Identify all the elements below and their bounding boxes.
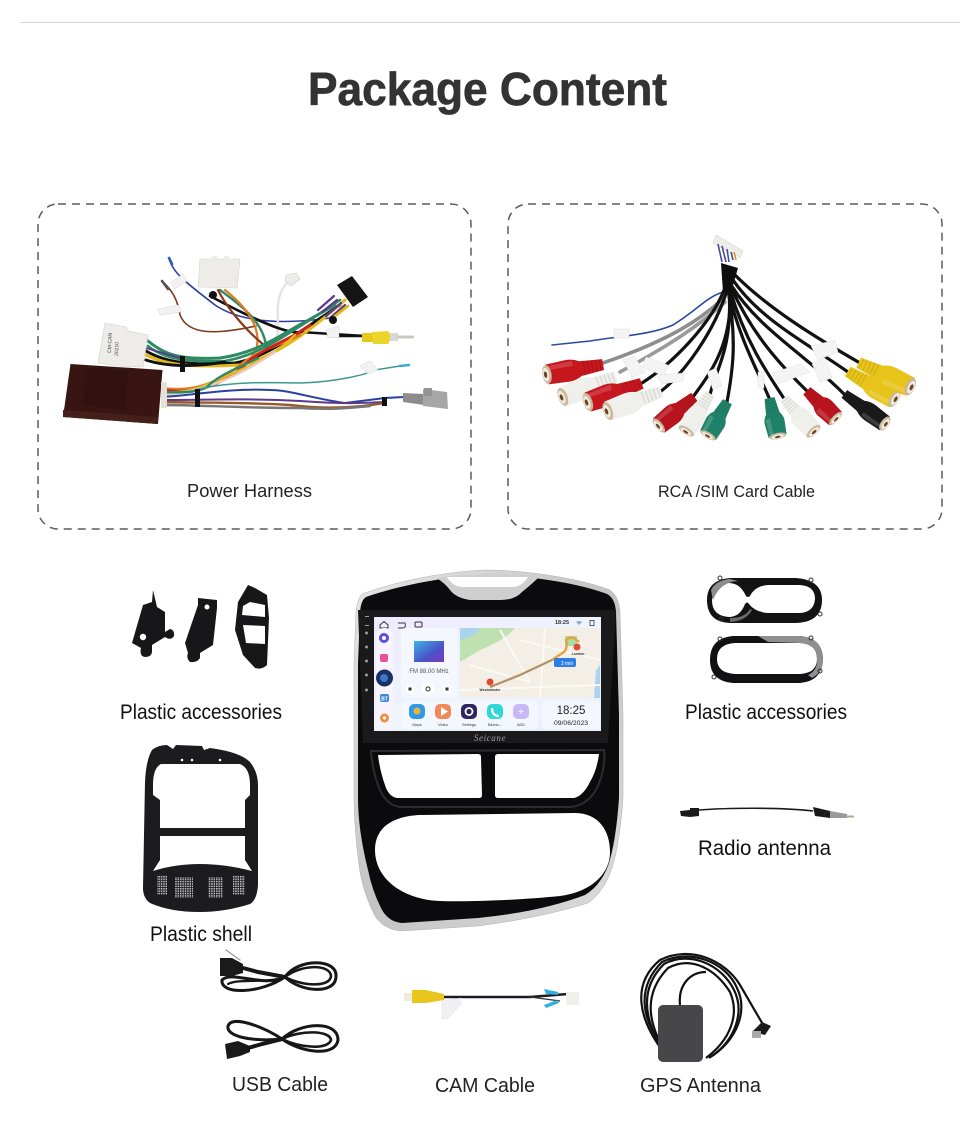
label: CAM cable: CAM Cable	[435, 1075, 535, 1097]
icon: white connector left: 20210	[114, 342, 120, 356]
icon: cable tags	[614, 329, 838, 390]
label: plastic accessories left: Plastic accessories	[120, 701, 282, 724]
status bar	[380, 620, 594, 628]
app tray: Settings	[462, 723, 476, 727]
label: plastic shell: Plastic shell	[150, 923, 252, 946]
app tray: Blueto...	[488, 723, 502, 727]
icon: black connector	[337, 276, 368, 307]
status bar: 18:25	[555, 620, 569, 626]
app tray: Maps	[412, 723, 422, 727]
map: London	[572, 652, 584, 656]
icon: right vent opening	[495, 754, 599, 798]
label: GPS antenna: GPS Antenna	[640, 1075, 762, 1097]
label: USB cable: USB Cable	[232, 1074, 328, 1096]
panel: head unit	[354, 570, 623, 931]
icon: silver frame	[354, 570, 623, 931]
map: Westminster	[480, 688, 501, 692]
icon: handle opening	[447, 577, 528, 587]
app rail: BT	[381, 696, 388, 702]
icon: white connector left	[98, 323, 148, 367]
icon: plastic shell	[143, 745, 258, 912]
icon: RCA connectors	[541, 353, 919, 443]
icon: USB cable bottom	[225, 1021, 338, 1059]
app tray	[401, 701, 538, 729]
title: Package Content	[308, 63, 667, 115]
icon: white connector left: CM·CAN	[107, 332, 114, 353]
icon: display bezel	[358, 610, 616, 743]
icon: white connector top	[198, 256, 240, 288]
icon: dark control box	[63, 364, 167, 424]
label: radio antenna: Radio antenna	[698, 837, 831, 860]
panel: RCA / SIM card cable	[508, 204, 942, 529]
clock card: 18:25	[557, 705, 585, 717]
map	[460, 628, 600, 698]
wires: cable fan	[552, 275, 860, 402]
wires: harness bundles	[146, 258, 404, 409]
clock card: 09/06/2023	[554, 720, 588, 727]
icon: USB cable top	[220, 950, 336, 991]
icon: vent surround gloss	[371, 750, 604, 807]
app tray: ADD	[517, 723, 525, 727]
label: power harness: Power Harness	[187, 481, 312, 501]
app rail	[376, 628, 393, 730]
icon: radio antenna	[680, 807, 854, 818]
icon: top multi-pin connector	[713, 235, 743, 292]
icon: black fascia	[358, 575, 619, 923]
brand: Seicane	[474, 733, 506, 743]
clock card	[542, 701, 600, 729]
app tray: +	[518, 707, 524, 718]
panel: power harness	[38, 204, 471, 529]
label: plastic accessories right: Plastic accessories	[685, 701, 847, 724]
icon: CAM cable	[404, 989, 579, 1019]
icon: silver handle	[436, 574, 540, 600]
icon: side buttons	[365, 616, 369, 692]
icon: plastic accessories right	[707, 576, 823, 683]
icon: small white plug	[285, 273, 300, 286]
panel: touchscreen	[374, 617, 601, 731]
map: 3 min	[561, 661, 573, 667]
icon: yellow RCA plug	[333, 331, 414, 344]
icon: GPS antenna	[641, 954, 771, 1062]
icon: climate control opening	[375, 813, 610, 901]
icon: left vent opening	[378, 754, 482, 798]
radio card	[401, 628, 458, 698]
icon: grey connector	[403, 388, 448, 409]
label: RCA / SIM card cable: RCA /SIM Card Cable	[658, 482, 815, 501]
app tray: Video	[438, 723, 448, 727]
radio card: FM 88.00 MHz	[409, 669, 449, 675]
icon: plastic accessories left	[132, 585, 269, 669]
icon: cable ties and tags	[158, 258, 409, 407]
